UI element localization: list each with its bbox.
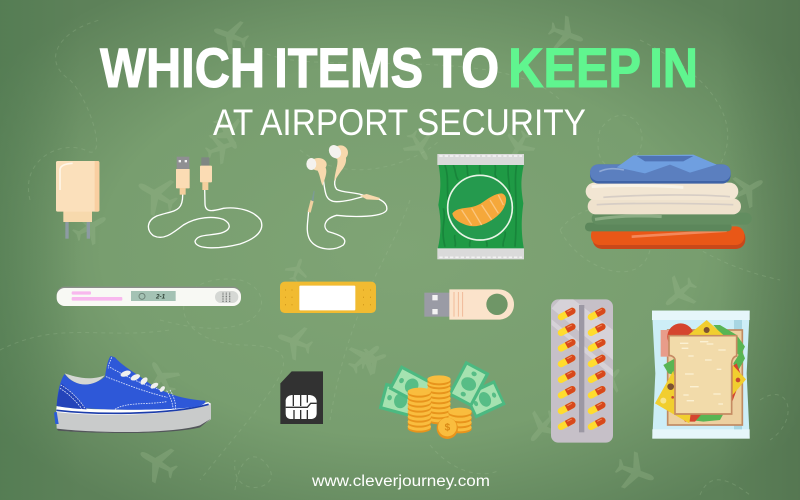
icon: cash and coins: $	[445, 423, 451, 434]
icon: pregnancy test	[57, 287, 241, 306]
tall coin stack	[427, 375, 451, 424]
icon: cash and coins	[379, 361, 506, 439]
icon: chips bag	[437, 154, 524, 259]
icon: folded clothes	[585, 155, 752, 249]
footer url: www.cleverjourney.com	[311, 473, 490, 490]
icon: usb flash drive	[424, 289, 514, 320]
icon: usb cable	[148, 157, 262, 248]
icon: pill blister pack	[551, 299, 613, 443]
icon: sim card	[280, 371, 323, 424]
icon: pregnancy test: 2-1	[155, 294, 166, 301]
icon: earphones	[306, 143, 387, 249]
icon: blue sneaker	[54, 356, 211, 433]
subtitle: AT AIRPORT SECURITY	[213, 102, 586, 143]
icon: phone charger	[56, 161, 99, 239]
title: WHICH ITEMS TO KEEP IN	[100, 36, 698, 99]
icon: adhesive bandage	[280, 282, 376, 313]
icon: wrapped sandwich	[652, 311, 750, 439]
